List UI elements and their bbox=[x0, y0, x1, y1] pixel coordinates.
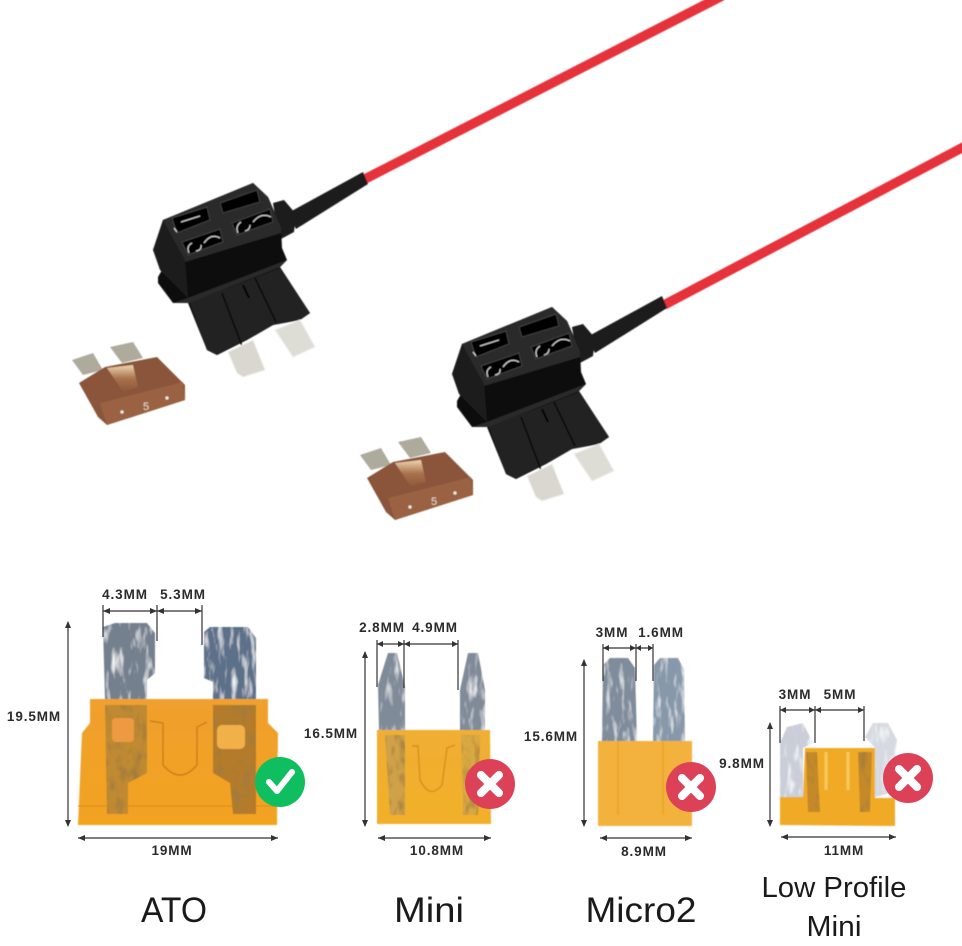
height dimension: 19.5MM bbox=[7, 709, 61, 724]
panel: Micro2 fuse bbox=[524, 625, 716, 930]
side face bbox=[452, 344, 487, 422]
top face bbox=[462, 307, 580, 386]
top width dimensions bbox=[779, 687, 864, 743]
top width dimensions: 5MM bbox=[824, 687, 856, 702]
height dimension: 15.6MM bbox=[524, 729, 578, 744]
blades bbox=[527, 464, 564, 501]
sheath collar bbox=[273, 200, 296, 240]
panel: Low Profile Mini fuse bbox=[719, 687, 933, 943]
top width dimensions: 1.6MM bbox=[638, 625, 684, 640]
label: Micro2: Micro2 bbox=[586, 891, 696, 930]
photo: brown ATO fuse, upper left bbox=[72, 342, 185, 425]
body bbox=[367, 452, 473, 520]
photo: fuse tap with red wire, center bbox=[452, 143, 962, 501]
icon: red cross bbox=[883, 753, 933, 803]
wire sheath bbox=[587, 296, 667, 353]
body bbox=[79, 357, 185, 425]
height dimension bbox=[304, 651, 368, 827]
wire sheath bbox=[288, 172, 368, 229]
Low Profile Mini fuse photo bbox=[780, 723, 897, 826]
height dimension bbox=[7, 621, 71, 827]
base width dimension bbox=[600, 835, 692, 859]
ledge bbox=[173, 260, 287, 303]
sockets bbox=[172, 190, 273, 255]
top width dimensions: 2.8MM bbox=[359, 620, 405, 635]
top width dimensions bbox=[359, 620, 458, 690]
red wire bbox=[664, 143, 962, 305]
label: Low Profile Mini: Mini bbox=[806, 911, 862, 943]
rating number: 5 bbox=[143, 401, 149, 413]
top width dimensions: 5.3MM bbox=[160, 587, 206, 602]
ledge bbox=[472, 384, 586, 427]
top width dimensions: 3MM bbox=[779, 687, 811, 702]
top width dimensions: 4.9MM bbox=[412, 620, 458, 635]
top face bbox=[163, 183, 281, 262]
base width dimension bbox=[378, 835, 491, 858]
sheath collar bbox=[572, 324, 595, 364]
photo: brown ATO fuse, center bbox=[360, 437, 473, 520]
highlight bbox=[395, 460, 426, 487]
sockets bbox=[471, 314, 572, 379]
housing silhouette bbox=[153, 183, 310, 355]
Mini fuse photo bbox=[377, 653, 491, 824]
housing silhouette bbox=[452, 307, 609, 479]
base width dimension: 10.8MM bbox=[410, 843, 464, 858]
base width dimension: 11MM bbox=[824, 843, 864, 858]
icon: red cross bbox=[465, 759, 515, 809]
blades bbox=[72, 342, 143, 375]
height dimension bbox=[719, 722, 773, 827]
base width dimension bbox=[78, 835, 278, 858]
blades bbox=[360, 437, 431, 470]
height dimension bbox=[524, 659, 587, 827]
Micro2 fuse photo bbox=[598, 658, 692, 826]
photo: fuse tap with red wire, upper left bbox=[153, 0, 722, 377]
label: ATO: ATO bbox=[141, 891, 207, 930]
top width dimensions: 4.3MM bbox=[102, 587, 148, 602]
base width dimension bbox=[781, 834, 896, 858]
side face bbox=[153, 220, 188, 298]
icon: red cross bbox=[666, 762, 716, 812]
label: Mini: Mini bbox=[394, 891, 464, 930]
height dimension: 16.5MM bbox=[304, 726, 358, 741]
label: Low Profile Mini bbox=[762, 872, 906, 943]
base width dimension: 19MM bbox=[151, 843, 193, 858]
height dimension: 9.8MM bbox=[719, 756, 765, 771]
top width dimensions bbox=[102, 587, 206, 645]
red wire bbox=[365, 0, 722, 179]
plug plate bbox=[190, 268, 310, 355]
panel: Mini fuse bbox=[304, 620, 515, 930]
ATO fuse photo bbox=[78, 623, 278, 825]
label: Low Profile Mini: Low Profile bbox=[762, 872, 906, 904]
base width dimension: 8.9MM bbox=[621, 844, 667, 859]
highlight bbox=[107, 365, 138, 392]
panel: ATO fuse bbox=[7, 587, 305, 930]
rating number: 5 bbox=[431, 496, 437, 508]
top width dimensions bbox=[596, 625, 684, 681]
icon: green check bbox=[255, 757, 305, 807]
plug plate bbox=[489, 392, 609, 479]
blades bbox=[228, 340, 265, 377]
top width dimensions: 3MM bbox=[596, 625, 628, 640]
